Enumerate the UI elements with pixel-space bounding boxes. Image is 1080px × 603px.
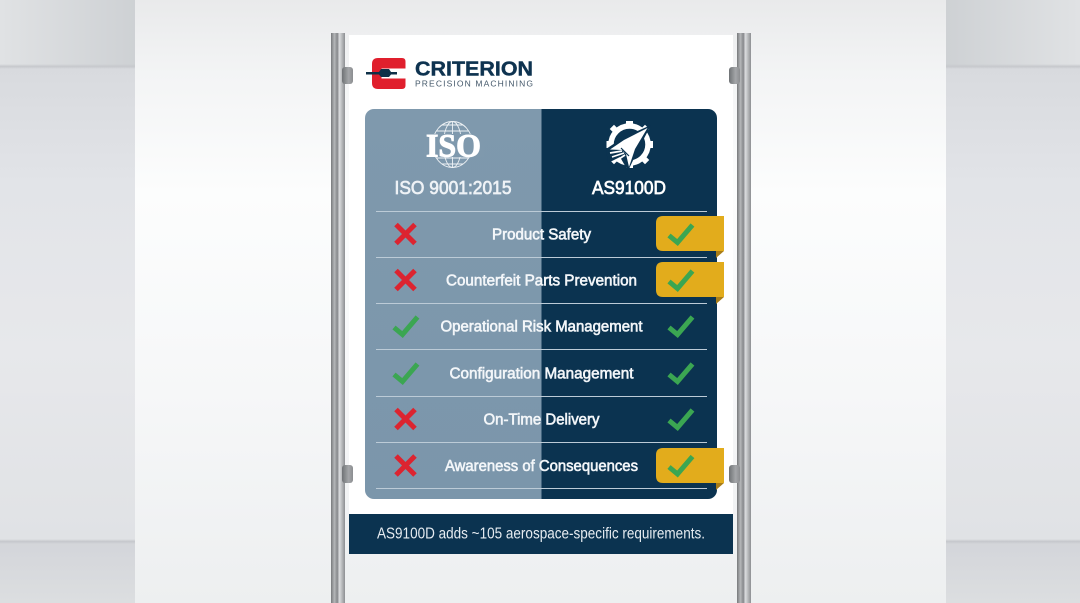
row: Awareness of Consequences: Awareness of Consequences: [445, 458, 638, 475]
row: Counterfeit Parts Prevention: Counterfeit Parts Prevention: [446, 272, 637, 290]
sign board: [349, 35, 733, 554]
right pole: [729, 33, 751, 603]
row: Configuration Management: [394, 364, 692, 382]
panel: comparison table: [365, 109, 724, 499]
row: On-Time Delivery: [396, 410, 692, 428]
footer banner: [349, 514, 733, 554]
icon: gear with rocket: [606, 121, 653, 171]
row: Product Safety: [396, 216, 724, 258]
row: Counterfeit Parts Prevention: [396, 262, 724, 304]
row: Awareness of Consequences: [396, 448, 724, 490]
row: Operational Risk Management: Operational Risk Management: [440, 318, 643, 336]
icon: ISO globe: ISO: [426, 128, 481, 164]
wordmark: CRITERION: [415, 58, 533, 80]
icon: red C mark with connector: [366, 58, 406, 89]
row: Configuration Management: Configuration Management: [450, 366, 634, 382]
footer banner: AS9100D adds ~105 aerospace-specific requirements.: [377, 526, 705, 542]
row: On-Time Delivery: On-Time Delivery: [484, 412, 600, 428]
heading: ISO 9001:2015: ISO 9001:2015: [394, 177, 512, 198]
tagline: PRECISION MACHINING: [415, 78, 533, 88]
logo: Criterion Precision Machining: [366, 58, 533, 89]
row: Product Safety: Product Safety: [492, 226, 591, 244]
left pole: [331, 33, 353, 603]
row: Operational Risk Management: [394, 317, 692, 336]
heading: AS9100D: AS9100D: [592, 177, 666, 198]
